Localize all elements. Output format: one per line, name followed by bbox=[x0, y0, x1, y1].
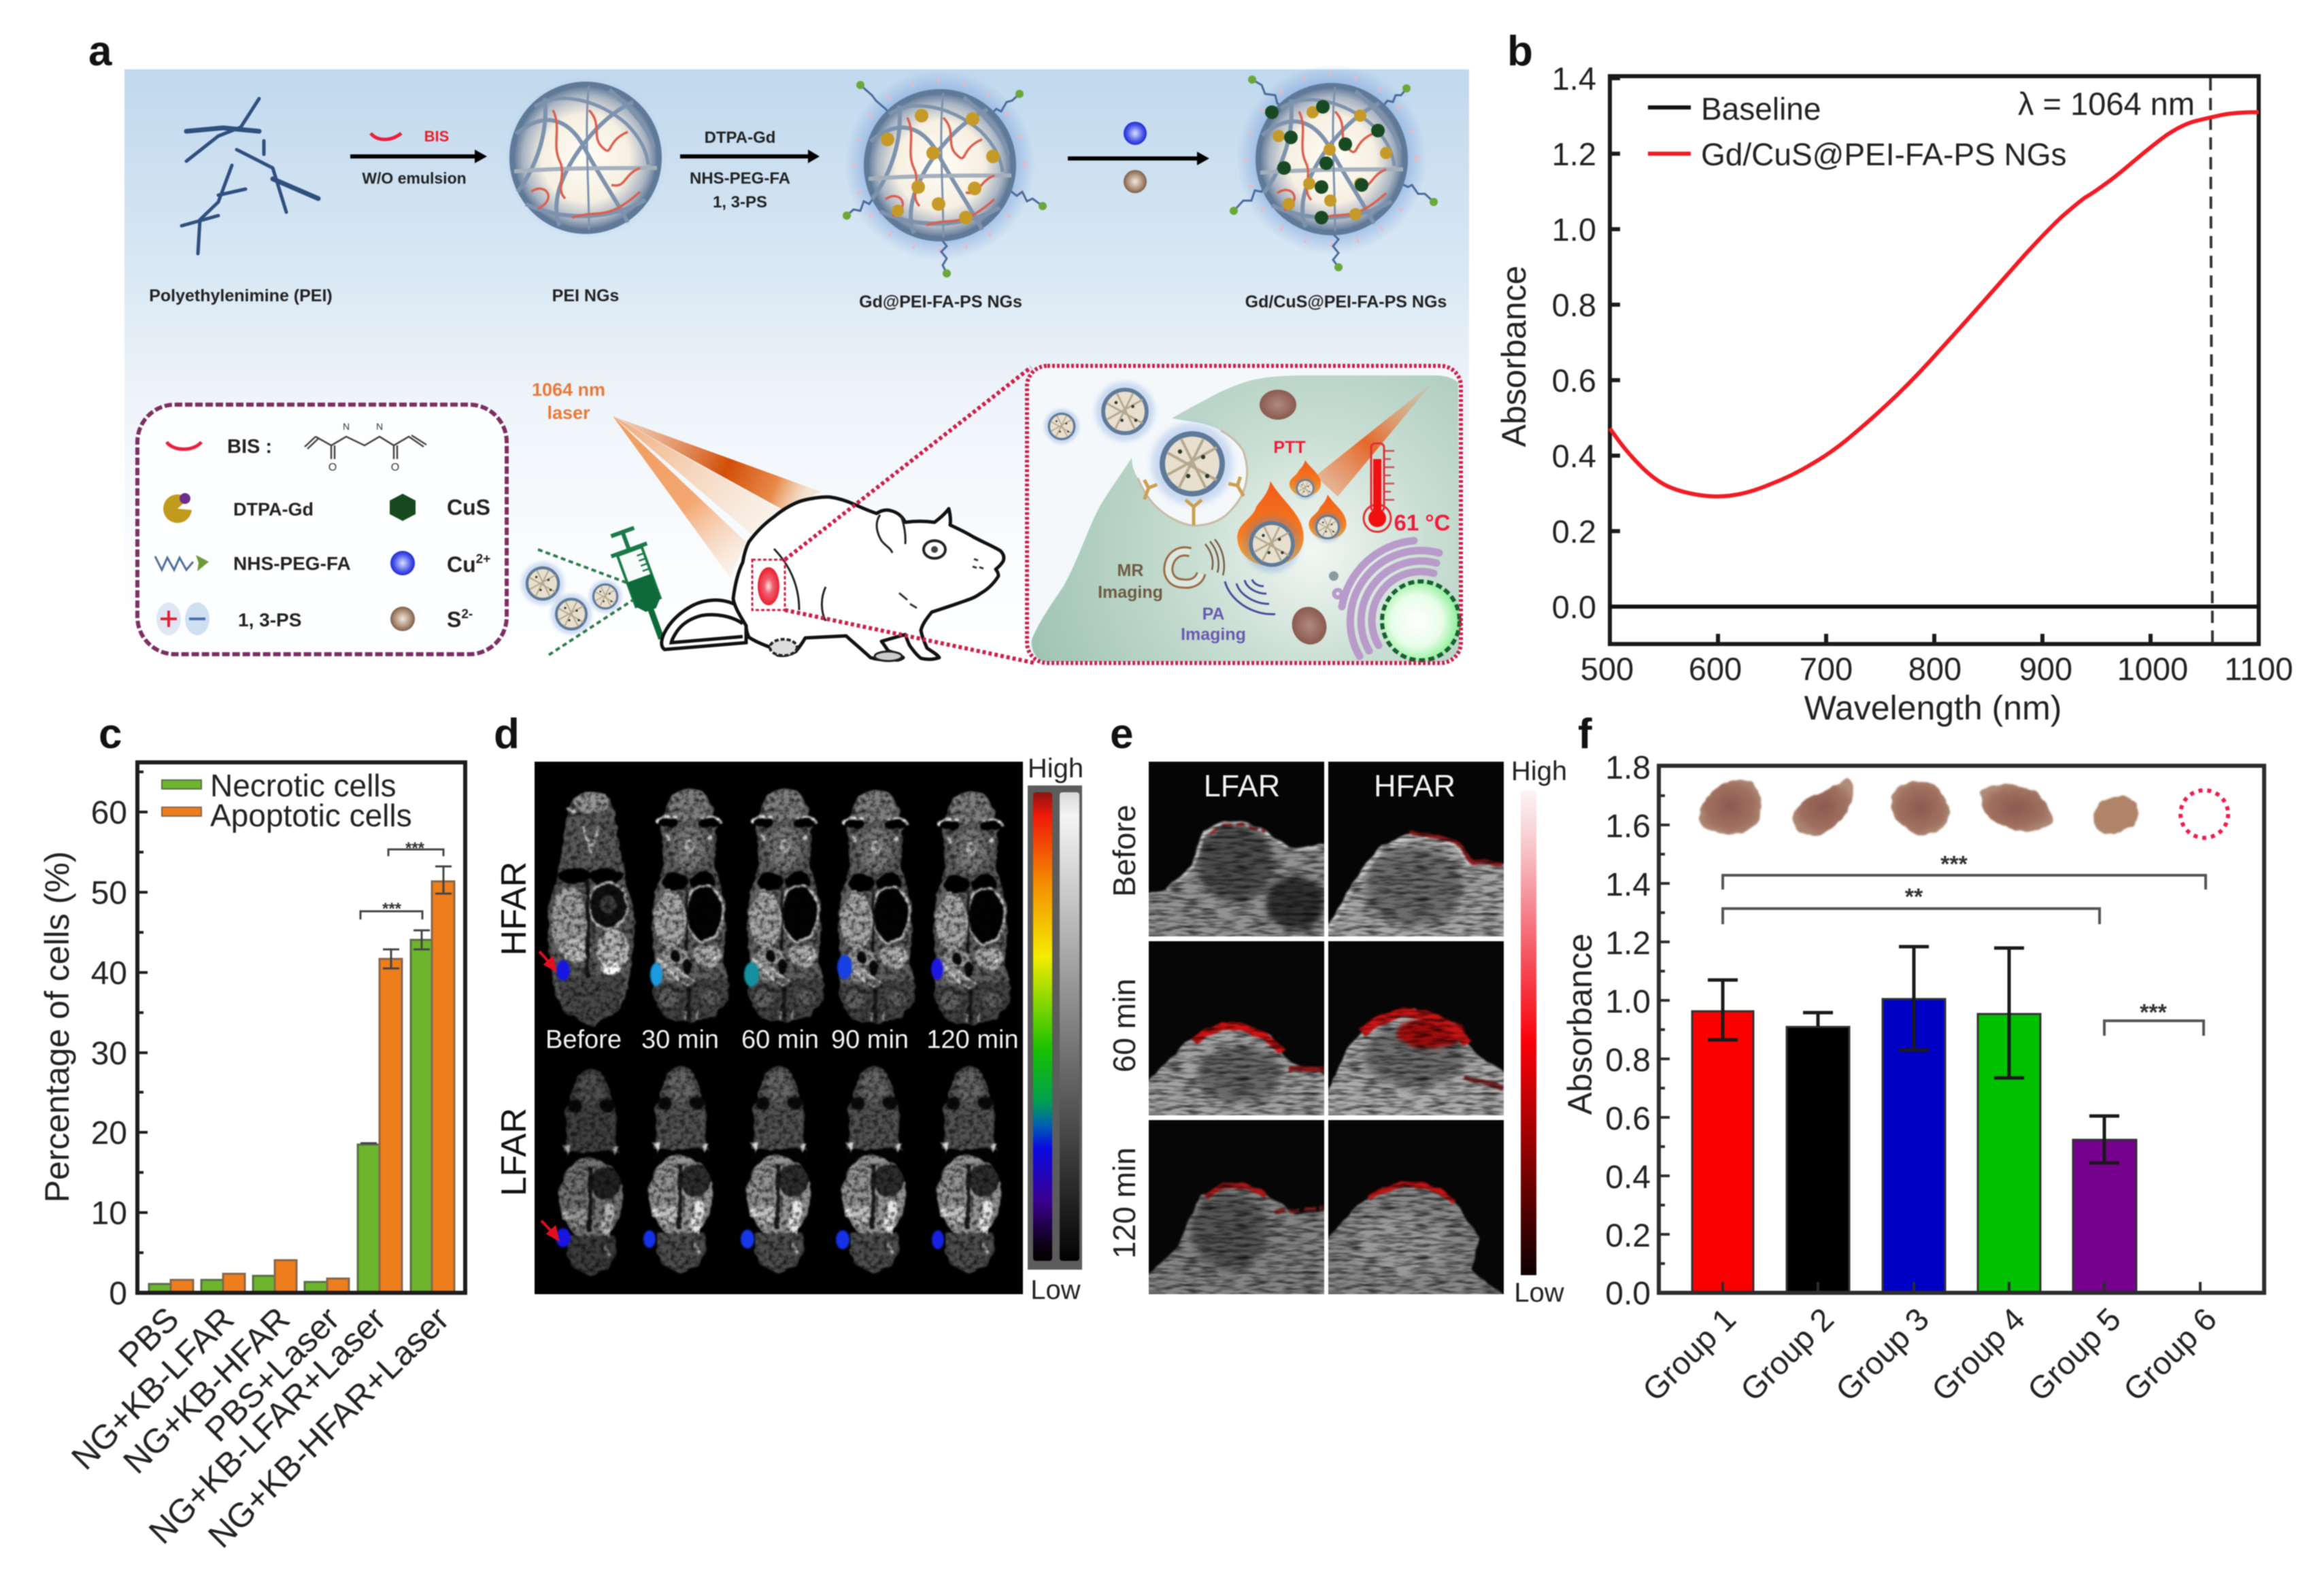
f y tick labels: 0.0 bbox=[1605, 1276, 1651, 1312]
b y tick labels: 0.6 bbox=[1552, 362, 1596, 399]
legend: Cu2+: 2+ bbox=[476, 552, 490, 566]
legend: NHS-PEG-FA bbox=[155, 553, 351, 574]
b y tick labels: 0.0 bbox=[1552, 589, 1596, 625]
panel a background bbox=[124, 69, 1469, 675]
scheme caption: PEI NGs: PEI NGs bbox=[552, 286, 619, 305]
magnet icon bbox=[1168, 539, 1224, 583]
f x tick labels: Group 5 bbox=[2021, 1301, 2127, 1408]
b baseline series bbox=[1610, 605, 2259, 609]
c x tick labels bbox=[64, 1300, 456, 1555]
e colour bar Low label: Low bbox=[1514, 1278, 1564, 1308]
c legend: Necrotic cells bbox=[210, 768, 397, 803]
f significance brackets: *** bbox=[1940, 851, 1968, 877]
panel label c: c bbox=[99, 711, 122, 758]
laser label bbox=[532, 379, 605, 423]
legend: BIS structure bbox=[167, 421, 426, 473]
e column label LFAR: LFAR bbox=[1204, 768, 1280, 803]
b y tick labels bbox=[1552, 61, 1596, 625]
f y tick labels: 0.4 bbox=[1605, 1160, 1651, 1196]
legend: BIS structure: N bbox=[343, 421, 350, 432]
b legend: Baseline bbox=[1701, 91, 1821, 126]
panel e: photoacoustic images bbox=[1107, 711, 1567, 1308]
d tumor signal spots bbox=[556, 955, 944, 1249]
c x tick labels: NG+KB-LFAR+Laser bbox=[141, 1300, 393, 1551]
c x tick labels: PBS+Laser bbox=[197, 1300, 347, 1449]
f y tick labels: 1.4 bbox=[1605, 867, 1651, 903]
b x tick labels: 900 bbox=[2019, 651, 2072, 687]
legend: NHS-PEG-FA: NHS-PEG-FA bbox=[233, 553, 351, 574]
b y tick labels: 1.0 bbox=[1552, 212, 1596, 248]
f y tick labels: 0.8 bbox=[1605, 1043, 1651, 1079]
d time labels: 60 min bbox=[741, 1026, 819, 1054]
f y tick labels: 1.8 bbox=[1605, 750, 1651, 786]
c bars: necrotic bbox=[149, 940, 432, 1293]
laser label: laser bbox=[547, 403, 590, 423]
f y axis title: Absorbance bbox=[1561, 934, 1599, 1115]
e image: LFAR 60 min bbox=[1148, 940, 1325, 1116]
c y tick labels: 40 bbox=[91, 955, 127, 992]
c y axis title: Percentage of cells (%) bbox=[38, 851, 76, 1202]
e image: HFAR before bbox=[1328, 760, 1504, 937]
internal laser beam bbox=[1315, 383, 1432, 496]
b x tick labels: 800 bbox=[1908, 651, 1961, 687]
legend: Cu2+ bbox=[390, 551, 490, 577]
b legend bbox=[1648, 91, 2066, 172]
legend: BIS structure: N bbox=[376, 421, 383, 432]
PA wave arcs bbox=[1225, 579, 1275, 614]
c x tick labels: NG+KB-HFAR+Laser bbox=[201, 1300, 456, 1555]
f error bars bbox=[1708, 947, 2119, 1163]
e row label Before: Before bbox=[1107, 805, 1142, 897]
b x tick labels: 1000 bbox=[2117, 651, 2188, 687]
e colour bar High label: High bbox=[1511, 756, 1567, 786]
f x tick labels: Group 1 bbox=[1636, 1301, 1742, 1408]
legend: DTPA-Gd bbox=[163, 493, 314, 523]
d row label LFAR: LFAR bbox=[494, 1108, 534, 1196]
endocytosis pocket bbox=[1138, 423, 1249, 526]
c x tick labels: NG+KB-LFAR bbox=[64, 1300, 241, 1477]
inset: tumor cell mechanism bbox=[1027, 366, 1461, 663]
f x tick labels: Group 6 bbox=[2117, 1301, 2223, 1408]
d colour bar Low label: Low bbox=[1030, 1275, 1081, 1305]
e row label 60 min: 60 min bbox=[1107, 979, 1142, 1072]
PA imaging label: PA bbox=[1202, 605, 1224, 624]
d time labels: 30 min bbox=[641, 1026, 719, 1054]
scheme caption: Polyethylenimine (PEI): Polyethylenimine (PEI) bbox=[149, 286, 333, 305]
e colour bar bbox=[1521, 791, 1536, 1275]
b wavelength annotation: λ = 1064 nm bbox=[2018, 86, 2195, 122]
temperature label: 61 °C bbox=[1394, 510, 1450, 535]
legend: BIS structure: O bbox=[329, 462, 337, 473]
mouse outline bbox=[662, 497, 1004, 661]
legend: DTPA-Gd: DTPA-Gd bbox=[233, 499, 314, 520]
b x axis title: Wavelength (nm) bbox=[1804, 689, 2061, 727]
b y tick labels: 0.8 bbox=[1552, 287, 1596, 323]
e image: LFAR 120 min bbox=[1148, 1119, 1325, 1295]
legend: BIS structure: BIS : bbox=[227, 436, 272, 458]
d LFAR row mice bbox=[559, 1066, 1001, 1276]
e image: HFAR 120 min bbox=[1328, 1119, 1504, 1295]
f y tick labels: 1.6 bbox=[1605, 809, 1651, 845]
c y tick labels bbox=[91, 795, 127, 1312]
f significance brackets: *** bbox=[2140, 1000, 2168, 1026]
c y tick labels: 50 bbox=[91, 875, 127, 911]
d red arrows bbox=[539, 951, 558, 1239]
PEI nanogel sphere bbox=[504, 76, 667, 239]
legend: CuS bbox=[390, 494, 490, 521]
PTT label: PTT bbox=[1273, 438, 1306, 457]
b x tick labels: 700 bbox=[1800, 651, 1853, 687]
organelle: Golgi stacks bbox=[1336, 541, 1439, 656]
d row label HFAR: HFAR bbox=[494, 862, 534, 955]
small vesicle bbox=[1329, 571, 1338, 581]
e row label 120 min: 120 min bbox=[1107, 1147, 1142, 1259]
arrow: BIS W/O emulsion: W/O emulsion bbox=[362, 169, 467, 187]
legend: BIS structure: O bbox=[391, 462, 399, 473]
c error bars bbox=[360, 866, 452, 1143]
PEI branched polymer bbox=[182, 99, 318, 254]
f axes frame and ticks bbox=[1659, 766, 2264, 1293]
panel label b: b bbox=[1507, 28, 1533, 75]
b y tick labels: 0.4 bbox=[1552, 438, 1596, 474]
cell body bbox=[1032, 375, 1460, 662]
arrow: DTPA-Gd, NHS-PEG-FA, 1,3-PS: NHS-PEG-FA bbox=[690, 169, 790, 188]
arrow: Cu2+ and S2- addition bbox=[1068, 122, 1209, 193]
syringe bbox=[605, 526, 679, 645]
f y tick labels bbox=[1605, 750, 1651, 1312]
MR imaging label bbox=[1098, 561, 1163, 602]
b y tick labels: 1.4 bbox=[1552, 61, 1596, 97]
b red absorbance curve bbox=[1610, 112, 2259, 496]
e image: HFAR 60 min bbox=[1328, 940, 1504, 1116]
c significance brackets: *** bbox=[382, 900, 402, 918]
d colour bar High label: High bbox=[1028, 754, 1083, 783]
c y tick labels: 60 bbox=[91, 795, 127, 831]
panel c: cell death bar chart bbox=[38, 711, 465, 1555]
f x tick labels: Group 2 bbox=[1734, 1301, 1840, 1408]
c x tick labels: PBS bbox=[111, 1300, 186, 1375]
PA imaging label: Imaging bbox=[1181, 625, 1246, 644]
d colour bars bbox=[1028, 785, 1082, 1270]
f y tick labels: 1.2 bbox=[1605, 926, 1651, 962]
panel label f: f bbox=[1578, 711, 1592, 758]
Gd/CuS@PEI-FA-PS nanogel sphere bbox=[1230, 64, 1438, 271]
panel b: absorbance spectrum bbox=[1495, 28, 2293, 727]
d time labels: Before bbox=[545, 1026, 622, 1054]
b y axis title: Absorbance bbox=[1495, 266, 1533, 447]
c bars: apoptotic bbox=[171, 881, 454, 1293]
b axes frame and ticks bbox=[1610, 76, 2259, 644]
panel d: MRI images bbox=[494, 711, 1083, 1305]
c legend: Apoptotic cells bbox=[210, 798, 412, 833]
arrow: DTPA-Gd, NHS-PEG-FA, 1,3-PS bbox=[680, 129, 820, 212]
c axes frame and ticks bbox=[137, 762, 465, 1293]
arrow: BIS W/O emulsion bbox=[350, 128, 487, 187]
vesicles bbox=[1260, 390, 1332, 649]
f x tick labels: Group 4 bbox=[1925, 1301, 2032, 1408]
c y tick labels: 10 bbox=[91, 1196, 127, 1232]
d HFAR row mice bbox=[548, 789, 1010, 1026]
c y tick labels: 20 bbox=[91, 1115, 127, 1151]
flames with nanoparticles bbox=[1237, 460, 1347, 573]
b x tick labels: 600 bbox=[1689, 651, 1742, 687]
PA imaging label bbox=[1181, 605, 1246, 644]
legend: 1,3-PS: 1, 3-PS bbox=[238, 609, 301, 630]
f empty group 6 dotted circle bbox=[2180, 790, 2228, 838]
MR imaging label: MR bbox=[1117, 561, 1143, 580]
panel f: tumor absorbance bar chart bbox=[1561, 711, 2264, 1408]
panel label a: a bbox=[88, 28, 112, 75]
legend box bbox=[137, 405, 507, 654]
f bars bbox=[1692, 999, 2136, 1293]
f x tick labels bbox=[1636, 1301, 2223, 1408]
panel label e: e bbox=[1110, 711, 1133, 758]
e column label HFAR: HFAR bbox=[1374, 768, 1455, 803]
legend: S2- bbox=[390, 607, 473, 632]
f significance brackets bbox=[1723, 851, 2206, 1036]
legend: 1,3-PS bbox=[156, 603, 301, 635]
extracellular nanoparticles bbox=[1045, 382, 1155, 443]
b y tick labels: 0.2 bbox=[1552, 513, 1596, 549]
f significance brackets: ** bbox=[1905, 884, 1923, 910]
b dashed 1064 nm line bbox=[2210, 78, 2212, 643]
d time labels bbox=[545, 1026, 1019, 1054]
injected nanoparticles bbox=[521, 549, 633, 655]
b legend: Gd/CuS@PEI-FA-PS NGs bbox=[1701, 137, 2066, 172]
d black image background bbox=[535, 762, 1023, 1294]
c legend bbox=[162, 768, 412, 833]
scheme caption: Gd@PEI-FA-PS NGs: Gd@PEI-FA-PS NGs bbox=[859, 292, 1022, 311]
f x tick labels: Group 3 bbox=[1829, 1301, 1936, 1408]
panel a: synthesis and mechanism schematic bbox=[88, 28, 1469, 675]
b x tick labels bbox=[1581, 651, 2293, 687]
legend: S2-: S bbox=[447, 607, 461, 632]
f excised tumor photos bbox=[1700, 779, 2138, 836]
b x tick labels: 500 bbox=[1581, 651, 1634, 687]
e image: LFAR before bbox=[1148, 760, 1325, 937]
panel label d: d bbox=[494, 711, 520, 758]
d time labels: 90 min bbox=[831, 1026, 909, 1054]
arrow: DTPA-Gd, NHS-PEG-FA, 1,3-PS: 1, 3-PS bbox=[713, 193, 767, 212]
inset dotted frame bbox=[1027, 366, 1461, 663]
c y tick labels: 0 bbox=[109, 1276, 127, 1312]
laser beams bbox=[613, 416, 821, 578]
Gd@PEI-FA-PS nanogel sphere bbox=[843, 70, 1047, 277]
arrow: DTPA-Gd, NHS-PEG-FA, 1,3-PS: DTPA-Gd bbox=[705, 129, 775, 147]
MR imaging label: Imaging bbox=[1098, 583, 1163, 602]
d time labels: 120 min bbox=[926, 1026, 1019, 1054]
c significance brackets: *** bbox=[405, 839, 425, 858]
c x tick labels: NG+KB-HFAR bbox=[116, 1300, 297, 1481]
legend: Cu2+: Cu bbox=[447, 552, 476, 577]
b x tick labels: 1100 bbox=[2224, 651, 2293, 687]
arrow: BIS W/O emulsion: BIS bbox=[424, 128, 449, 145]
laser label: 1064 nm bbox=[532, 379, 605, 400]
b y tick labels: 1.2 bbox=[1552, 136, 1596, 172]
c y tick labels: 30 bbox=[91, 1036, 127, 1072]
legend: S2-: 2- bbox=[461, 607, 473, 622]
scheme caption: Gd/CuS@PEI-FA-PS NGs: Gd/CuS@PEI-FA-PS NGs bbox=[1245, 292, 1447, 311]
f y tick labels: 0.6 bbox=[1605, 1101, 1651, 1137]
tumor marker on mouse bbox=[752, 560, 785, 610]
thermometer bbox=[1364, 443, 1394, 532]
nucleus bbox=[1382, 581, 1460, 660]
legend: CuS: CuS bbox=[447, 495, 490, 520]
f y tick labels: 1.0 bbox=[1605, 984, 1651, 1020]
f y tick labels: 0.2 bbox=[1605, 1218, 1651, 1254]
dotted callout lines bbox=[785, 367, 1035, 663]
c significance brackets bbox=[360, 839, 443, 919]
